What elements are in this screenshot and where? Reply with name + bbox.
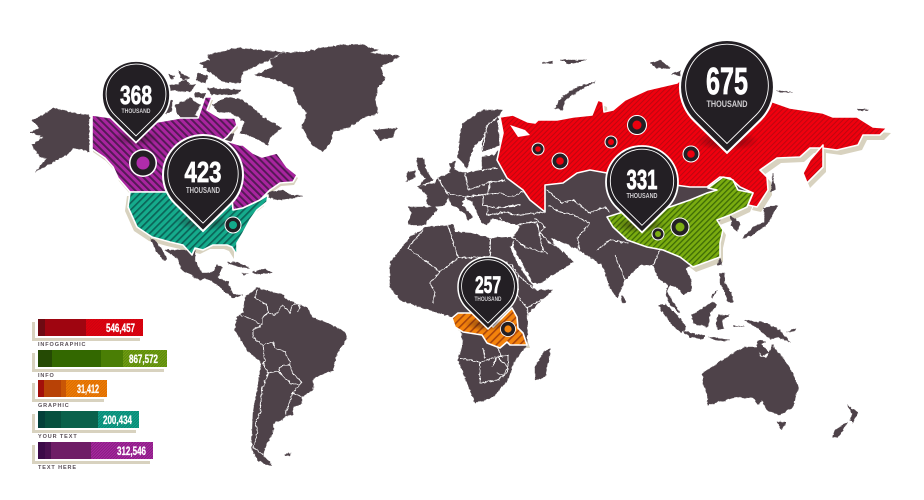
Scandinavia <box>450 110 502 172</box>
region: Canada <box>92 97 297 210</box>
map markers <box>129 116 699 336</box>
world map land masses <box>30 45 868 465</box>
pin: 423 thousand <box>163 135 243 231</box>
Greenland <box>255 45 400 152</box>
marker centres: Russia <box>535 120 695 165</box>
Madagascar <box>535 348 550 380</box>
bar: Info: INFO <box>38 373 55 379</box>
pin: 257 thousand: 257 <box>475 272 501 299</box>
bar: Infographic: 546,457 <box>106 323 135 335</box>
marker: USA <box>224 216 242 234</box>
bar: Your text: 200,434 <box>103 415 132 427</box>
Alaska <box>30 108 89 172</box>
pin: 368 thousand: 368 <box>120 80 152 110</box>
pin: 368 thousand <box>102 61 170 146</box>
region: China <box>607 177 753 267</box>
region shadows <box>93 75 891 351</box>
markers: Russia <box>532 116 699 169</box>
bar: Your text <box>32 411 139 440</box>
bar: Info: 867,572 <box>129 354 158 366</box>
pin: 257 thousand: THOUSAND <box>474 297 502 303</box>
British Isles and Iceland <box>373 128 433 187</box>
Tasmania and New Zealand <box>777 405 858 438</box>
bar: Graphic <box>32 380 107 409</box>
bar: Text here <box>32 442 153 471</box>
Arctic Russia islands <box>542 60 868 111</box>
pin: 423 thousand: THOUSAND <box>186 186 220 195</box>
bar: Info <box>32 350 167 379</box>
country borders <box>240 118 660 455</box>
pin: 331 thousand: THOUSAND <box>626 193 658 200</box>
bar: Infographic <box>32 319 143 348</box>
Australia <box>703 345 798 415</box>
pin: 331 thousand: 331 <box>626 164 658 195</box>
bar: Graphic: 31,412 <box>77 384 99 396</box>
pin: 675 thousand: THOUSAND <box>706 99 748 109</box>
Central America <box>150 238 272 298</box>
region: Russia <box>497 70 887 212</box>
marker: Canada <box>129 149 157 177</box>
pin: 257 thousand <box>458 257 518 331</box>
East Asia islands <box>717 173 778 265</box>
marker: Africa <box>500 322 516 336</box>
pin: 675 thousand: 675 <box>706 61 748 103</box>
bar chart legend <box>32 319 167 471</box>
bar: Graphic: GRAPHIC <box>38 403 70 409</box>
region: USA <box>128 192 268 255</box>
South America <box>235 288 347 465</box>
pin: 331 thousand <box>606 146 678 233</box>
marker centres: China <box>655 222 684 237</box>
region: Central Africa <box>452 308 527 348</box>
bar: Text here: TEXT HERE <box>38 465 77 471</box>
bar: Text here: 312,546 <box>117 446 146 458</box>
pin: 368 thousand: THOUSAND <box>122 108 151 115</box>
Africa <box>390 225 553 403</box>
pin: 675 thousand <box>680 40 774 153</box>
pin: 423 thousand: 423 <box>184 157 222 189</box>
Southeast Asia islands <box>622 273 796 356</box>
bar: Your text: YOUR TEXT <box>38 434 78 440</box>
Eurasia south and Europe <box>408 150 760 313</box>
markers: China <box>652 218 689 240</box>
bar: Infographic: INFOGRAPHIC <box>38 342 86 348</box>
Canadian arctic islands <box>160 48 303 200</box>
